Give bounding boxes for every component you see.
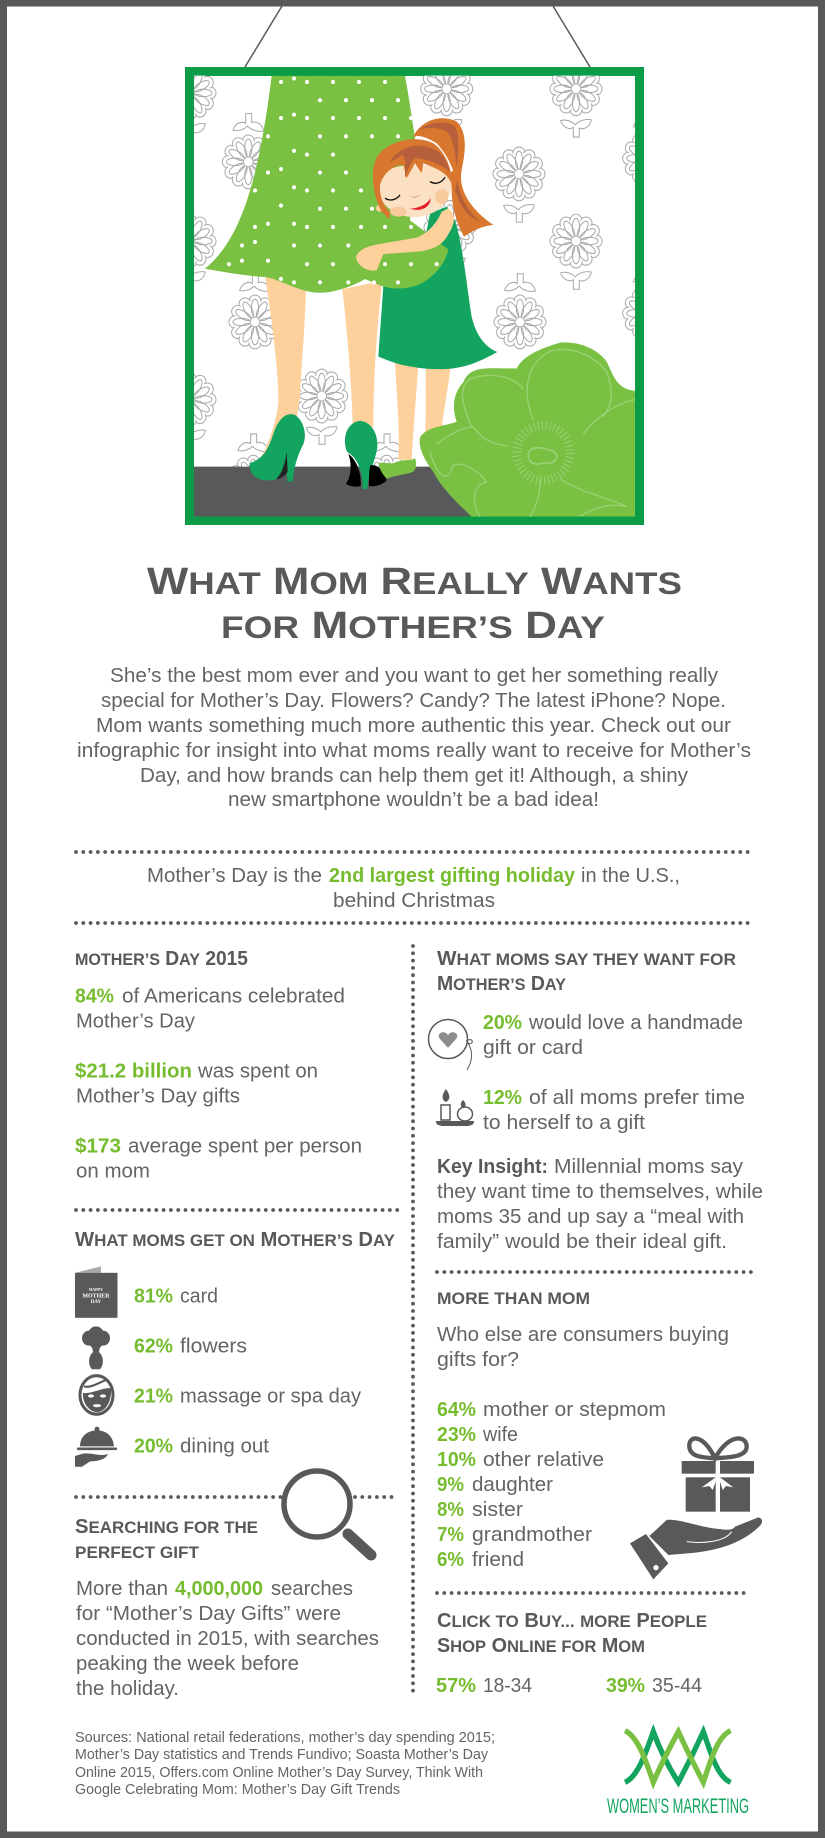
key fact banner	[147, 864, 680, 912]
panel: searching for the perfect gift: peaking the week before	[76, 1652, 299, 1675]
panel: Mother's Day 2015: on mom	[76, 1160, 150, 1182]
panel: what moms say they want: gift or card	[483, 1036, 583, 1059]
panel: Mother's Day 2015: 84%	[75, 984, 114, 1008]
panel: more than mom: 9%	[437, 1473, 464, 1496]
panel: more than mom: wife	[482, 1423, 518, 1446]
panel: what moms say they want: moms 35 and up say a “meal with	[437, 1205, 744, 1228]
girl's dress	[378, 207, 497, 369]
panel: what moms get: dining out	[180, 1434, 269, 1458]
intro paragraph: Day, and how brands can help them get it! Although, a shiny	[140, 764, 689, 787]
sources: Mother’s Day statistics and Trends Fundivo; Soasta Mother’s Day	[75, 1746, 488, 1763]
intro paragraph: Mom wants something much more authentic this year. Check out our	[96, 714, 731, 737]
panel: Mother's Day 2015: MOTHER’S DAY 2015	[75, 948, 248, 970]
floor	[194, 467, 471, 517]
panel: searching for the perfect gift	[75, 1516, 379, 1700]
panel: click to buy	[436, 1610, 707, 1697]
icon: embroidery hoop	[428, 1020, 472, 1070]
panel: searching for the perfect gift: for “Mother’s Day Gifts” were	[76, 1602, 341, 1625]
intro paragraph: new smartphone wouldn’t be a bad idea!	[228, 788, 599, 811]
panel: more than mom	[437, 1289, 729, 1571]
panel: searching for the perfect gift: More than	[76, 1577, 168, 1600]
panel: what moms get: WHAT MOMS GET ON MOTHER’S DAY	[75, 1229, 395, 1251]
panel: Mother's Day 2015: $21.2 billion	[75, 1060, 192, 1082]
sources: Sources: National retail federations, mother’s day spending 2015;	[75, 1729, 495, 1746]
panel: click to buy: SHOP ONLINE FOR MOM	[437, 1635, 645, 1657]
key fact banner: Mother’s Day is the	[147, 864, 322, 887]
icon: candles	[436, 1089, 474, 1126]
panel: Mother's Day 2015: of Americans celebrated	[122, 984, 345, 1008]
logo: Women's Marketing	[607, 1731, 749, 1818]
icon: card	[75, 1266, 118, 1318]
icon: gift on open hand	[630, 1438, 762, 1579]
panel: Mother's Day 2015	[75, 948, 362, 1182]
icon: magnifying glass	[284, 1471, 371, 1555]
panel: click to buy: 18-34	[483, 1674, 532, 1697]
panel: Mother's Day 2015: $173	[75, 1134, 121, 1158]
panel: more than mom: sister	[472, 1498, 523, 1521]
icon: card: MOTHER	[82, 1292, 110, 1300]
title: FOR MOTHER’S DAY	[221, 605, 605, 647]
sources	[75, 1729, 495, 1798]
key fact banner: 2nd largest gifting holiday	[329, 864, 576, 887]
girl's arm	[356, 208, 454, 271]
panel: what moms say they want: would love a handmade	[528, 1011, 743, 1034]
sources: Online 2015, Offers.com Online Mother’s Day Survey, Think With	[75, 1764, 483, 1781]
icon: card: DAY	[91, 1299, 101, 1305]
panel: what moms get: 81%	[134, 1284, 173, 1308]
panel: searching for the perfect gift: searches	[271, 1577, 353, 1600]
panel: more than mom: MORE THAN MOM	[437, 1289, 590, 1308]
intro paragraph: infographic for insight into what moms really want to receive for Mother’s	[77, 739, 751, 762]
panel: click to buy: 57%	[436, 1674, 476, 1697]
panel: what moms get: 21%	[134, 1384, 173, 1408]
panel: Mother's Day 2015: Mother’s Day gifts	[76, 1084, 240, 1108]
panel: more than mom: 10%	[437, 1448, 476, 1471]
panel: what moms get: 20%	[134, 1434, 173, 1458]
panel: what moms say they want: 20%	[483, 1011, 522, 1034]
panel: what moms get	[75, 1229, 395, 1467]
title: WHAT MOM REALLY WANTS	[147, 561, 682, 603]
sources: Google Celebrating Mom: Mother’s Day Gift Trends	[75, 1781, 400, 1798]
hanging strings	[245, 6, 590, 67]
panel: what moms say they want: family” would be their ideal gift.	[437, 1230, 727, 1253]
key fact banner: behind Christmas	[333, 889, 495, 912]
panel: what moms say they want	[428, 948, 763, 1253]
panel: what moms say they want: 12%	[483, 1086, 522, 1109]
panel: more than mom: 8%	[437, 1498, 464, 1521]
panel: more than mom: mother or stepmom	[483, 1398, 666, 1421]
key fact banner: in the U.S.,	[581, 864, 680, 887]
panel: what moms get: massage or spa day	[180, 1384, 362, 1408]
panel: what moms say they want: Millennial moms say	[554, 1155, 744, 1178]
panel: searching for the perfect gift: SEARCHING FOR THE	[75, 1516, 258, 1538]
panel: what moms say they want: of all moms prefer time	[529, 1086, 745, 1109]
icon: flowers	[82, 1326, 110, 1369]
panel: more than mom: grandmother	[472, 1523, 592, 1546]
bottom-right flower	[420, 342, 635, 517]
panel: more than mom: other relative	[483, 1448, 604, 1471]
framed illustration: mother and daughter hug	[185, 67, 644, 525]
intro paragraph: She’s the best mom ever and you want to get her something really	[110, 664, 719, 687]
intro paragraph	[77, 664, 751, 811]
panel: what moms get: flowers	[180, 1334, 247, 1358]
icon: cloche on hand	[75, 1427, 117, 1467]
panel: what moms say they want: they want time to themselves, while	[437, 1180, 763, 1203]
panel: searching for the perfect gift: the holiday.	[76, 1677, 179, 1700]
panel: what moms say they want: to herself to a gift	[483, 1111, 645, 1134]
panel: Mother's Day 2015: average spent per person	[128, 1134, 362, 1158]
panel: more than mom: 7%	[437, 1523, 464, 1546]
panel: more than mom: 64%	[437, 1398, 476, 1421]
panel: what moms get: 62%	[134, 1334, 173, 1358]
panel: what moms get: card	[180, 1284, 218, 1308]
panel: searching for the perfect gift: conducted in 2015, with searches	[76, 1627, 379, 1650]
panel: what moms say they want: WHAT MOMS SAY THEY WANT FOR	[437, 948, 736, 970]
title	[147, 561, 682, 647]
panel: Mother's Day 2015: Mother’s Day	[76, 1010, 196, 1032]
panel: more than mom: gifts for?	[437, 1348, 519, 1371]
panel: more than mom: friend	[472, 1548, 524, 1571]
panel: more than mom: 23%	[437, 1423, 476, 1446]
intro paragraph: special for Mother’s Day. Flowers? Candy? The latest iPhone? Nope.	[101, 689, 726, 712]
girl's shoe	[378, 458, 416, 479]
dress dots	[227, 76, 439, 284]
panel: what moms say they want: Key Insight:	[437, 1155, 548, 1178]
panel: searching for the perfect gift: 4,000,000	[175, 1577, 263, 1600]
mother's shoes	[249, 414, 305, 481]
icon: spa mask	[80, 1376, 113, 1414]
girl's legs	[395, 362, 451, 460]
mother's polka dot dress	[205, 76, 448, 293]
panel: more than mom: Who else are consumers buying	[437, 1323, 729, 1346]
panel: more than mom: daughter	[472, 1473, 553, 1496]
panel: Mother's Day 2015: was spent on	[197, 1060, 318, 1082]
panel: what moms say they want: MOTHER’S DAY	[437, 973, 566, 995]
panel: click to buy: 39%	[606, 1674, 645, 1697]
panel: click to buy: CLICK TO BUY... MORE PEOPLE	[437, 1610, 707, 1632]
mother's legs	[260, 276, 382, 460]
wallpaper flowers	[194, 76, 635, 517]
panel: click to buy: 35-44	[652, 1674, 702, 1697]
panel: more than mom: 6%	[437, 1548, 464, 1571]
panel: searching for the perfect gift: PERFECT GIFT	[75, 1543, 200, 1562]
girl's head	[373, 118, 493, 237]
icon: card: HAPPY	[89, 1287, 103, 1292]
